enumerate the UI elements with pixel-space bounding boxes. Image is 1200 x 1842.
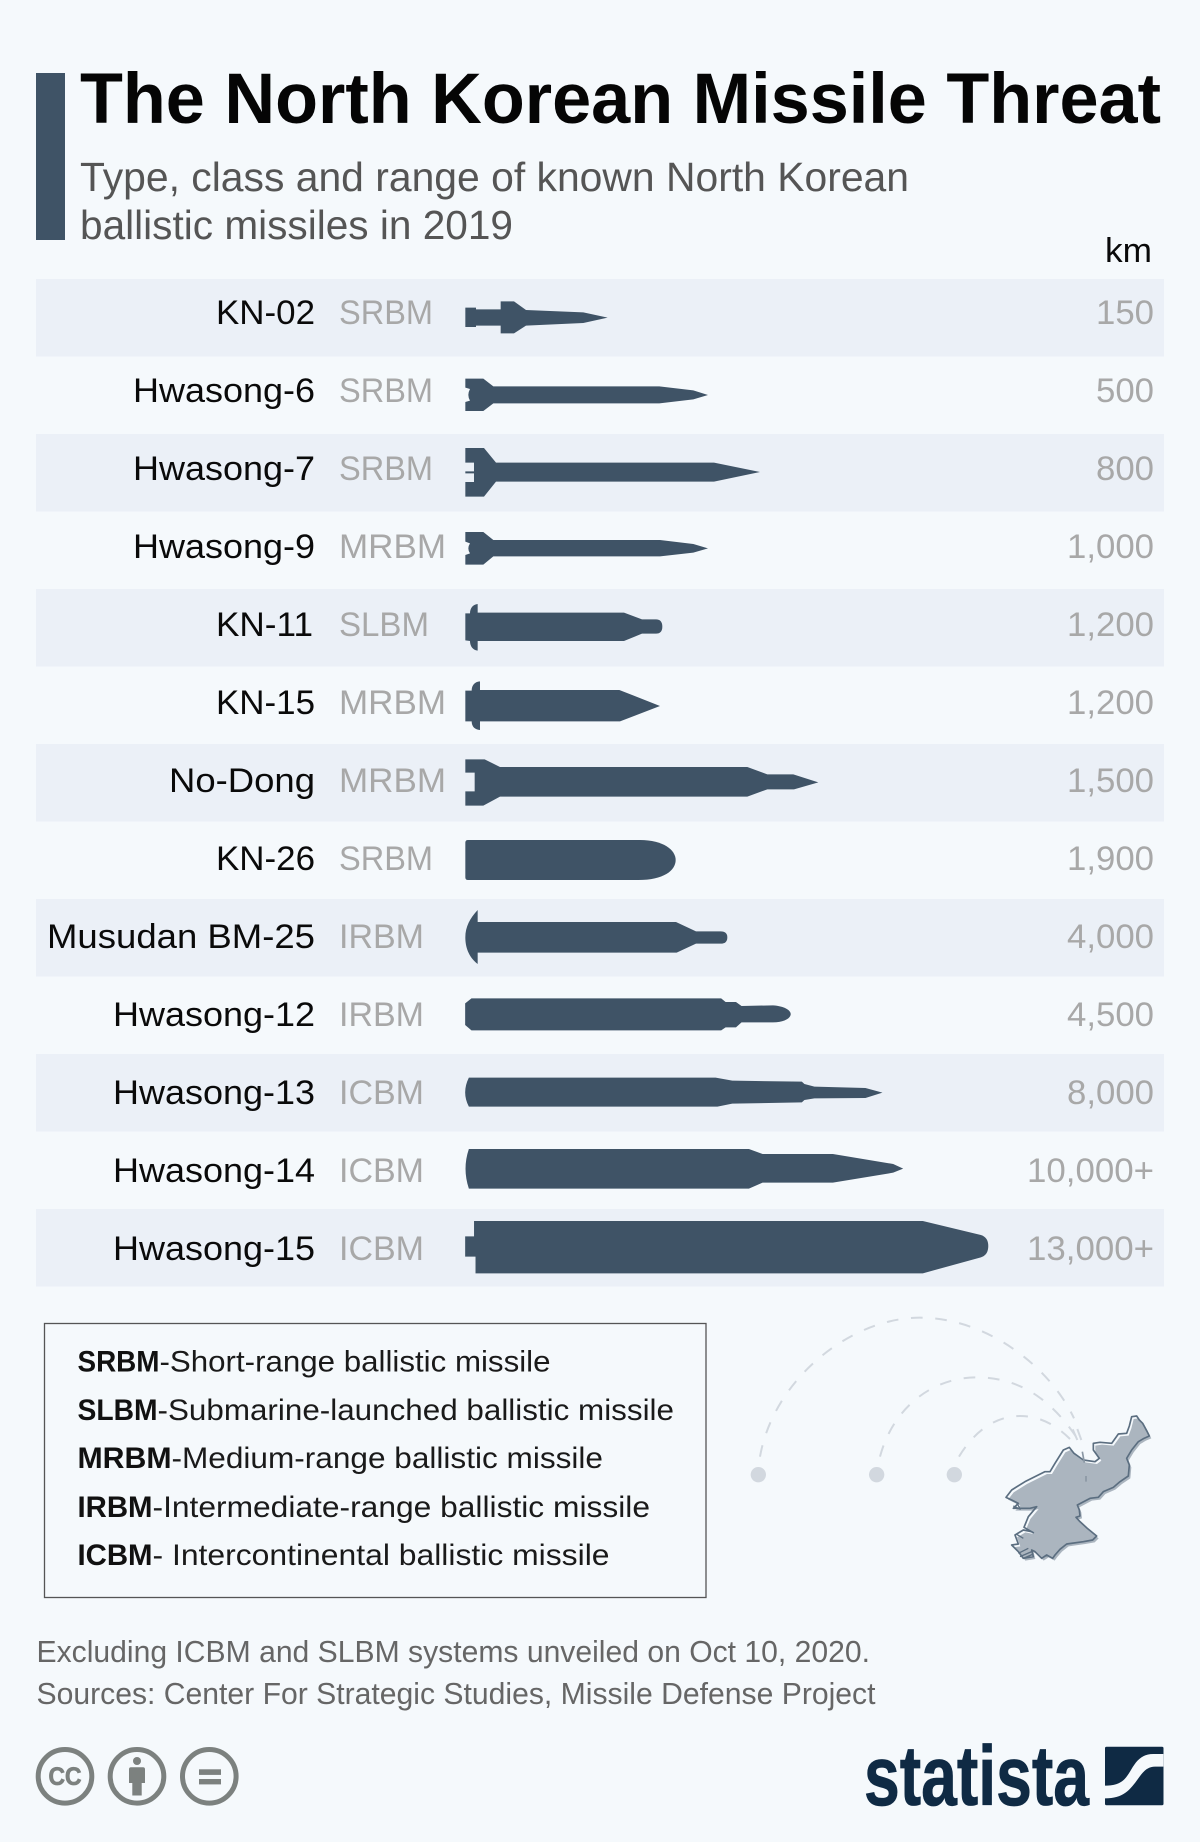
row: KN-15: MRBM [339,684,446,722]
row: Musudan BM-25: Musudan BM-25 [47,918,315,956]
legend: ICBM: ICBM [78,1539,152,1572]
row: KN-15: 1,200 [1067,684,1154,722]
icon: creative commons: CC [48,1763,82,1791]
icon: no derivatives [182,1750,236,1803]
row: KN-02 [36,279,1164,356]
row: Hwasong-7: 800 [1096,450,1154,488]
row: KN-15 [216,681,1154,730]
row: KN-02: SRBM [339,294,433,332]
row: Hwasong-9: 1,000 [1067,528,1154,566]
legend: MRBM: MRBM [78,1442,172,1475]
missile: KN-02 [465,301,608,333]
row: KN-11: SLBM [339,606,429,644]
row: Hwasong-7: SRBM [339,450,433,488]
row: KN-15: KN-15 [216,684,315,722]
missile: Hwasong-9 [465,532,708,565]
legend: SRBM: -Short-range ballistic missile [160,1346,550,1378]
row: Hwasong-13: ICBM [339,1074,424,1112]
row: KN-02: 150 [1096,294,1154,332]
row: Hwasong-7: Hwasong-7 [133,450,315,488]
row: Musudan BM-25: 4,000 [1067,918,1154,956]
missile: Hwasong-13 [465,1078,882,1107]
row: Hwasong-12: IRBM [339,996,424,1034]
row: Hwasong-12 [113,996,1154,1034]
legend: IRBM: IRBM [78,1491,152,1524]
row: Hwasong-12: Hwasong-12 [113,996,315,1034]
trajectory arcs with target dots [751,1318,1081,1482]
row: No-Dong: MRBM [339,762,446,800]
icon: creative commons [38,1750,92,1803]
row: KN-26: SRBM [339,840,433,878]
row: Hwasong-9 [133,528,1154,566]
row: Hwasong-6: Hwasong-6 [133,372,315,410]
unit label: km: km [1105,232,1152,270]
legend: MRBM: -Medium-range ballistic missile [172,1442,603,1475]
row: Hwasong-9: Hwasong-9 [133,528,315,566]
row: Hwasong-15: 13,000+ [1027,1230,1154,1268]
legend: SLBM: -Submarine-launched ballistic missile [158,1394,674,1427]
footnote and sources [36,1634,876,1711]
map: North Korea [1006,1416,1151,1561]
row: KN-26: 1,900 [1067,840,1154,878]
icon: attribution [110,1750,164,1803]
missile: KN-26 [465,840,676,880]
missile: KN-11 [465,604,662,651]
row: Hwasong-6: SRBM [339,372,433,410]
row: Hwasong-14: 10,000+ [1027,1152,1154,1190]
subtitle [80,154,909,248]
missile: Hwasong-7 [465,448,760,497]
footnote and sources: Excluding ICBM and SLBM systems unveiled on Oct 10, 2020. [36,1634,870,1669]
missile: Hwasong-15 [465,1221,988,1273]
missile: Hwasong-14 [466,1149,903,1189]
row: Hwasong-14: ICBM [339,1152,424,1190]
row: No-Dong: 1,500 [1067,762,1154,800]
row: Hwasong-9: MRBM [339,528,446,566]
row: Hwasong-7 [36,434,1164,512]
row: No-Dong [36,744,1164,822]
legend panel [44,1324,706,1598]
subtitle: ballistic missiles in 2019 [80,202,513,248]
row: Hwasong-6 [133,372,1154,411]
row: Hwasong-15: Hwasong-15 [113,1230,315,1268]
missile: Hwasong-12 [465,998,791,1030]
legend: SRBM: SRBM [78,1346,160,1378]
row: Hwasong-15 [36,1209,1164,1286]
footnote and sources: Sources: Center For Strategic Studies, Missile Defense Project [36,1676,876,1711]
subtitle: Type, class and range of known North Korean [80,154,909,200]
row: KN-11: 1,200 [1067,606,1154,644]
statista wordmark: statista [864,1729,1090,1823]
title block accent bar [36,73,65,240]
row: Hwasong-13: 8,000 [1067,1074,1154,1112]
row: KN-26: KN-26 [216,840,315,878]
missile: Musudan BM-25 [465,910,727,964]
row: Hwasong-12: 4,500 [1067,996,1154,1034]
row: Hwasong-14: Hwasong-14 [113,1152,315,1190]
row: Hwasong-14 [113,1149,1154,1190]
legend: SLBM: SLBM [78,1394,158,1427]
row: Hwasong-15: ICBM [339,1230,424,1268]
row: KN-26 [216,840,1154,880]
row: No-Dong: No-Dong [169,762,315,800]
row: Hwasong-13 [36,1054,1164,1132]
missile: Hwasong-6 [465,379,708,411]
missile: KN-15 [465,681,660,730]
missile: No-Dong [465,759,818,806]
row: Hwasong-6: 500 [1096,372,1154,410]
row: KN-02: KN-02 [216,294,315,332]
statista logo mark [1105,1747,1164,1805]
legend: IRBM: -Intermediate-range ballistic missile [152,1491,650,1524]
legend: ICBM: - Intercontinental ballistic missile [152,1539,610,1572]
title: The North Korean Missile Threat [80,60,1161,139]
row: KN-11 [36,589,1164,666]
row: KN-11: KN-11 [216,606,313,644]
row: Hwasong-13: Hwasong-13 [113,1074,315,1112]
row: Musudan BM-25 [36,899,1164,976]
row: Musudan BM-25: IRBM [339,918,424,956]
